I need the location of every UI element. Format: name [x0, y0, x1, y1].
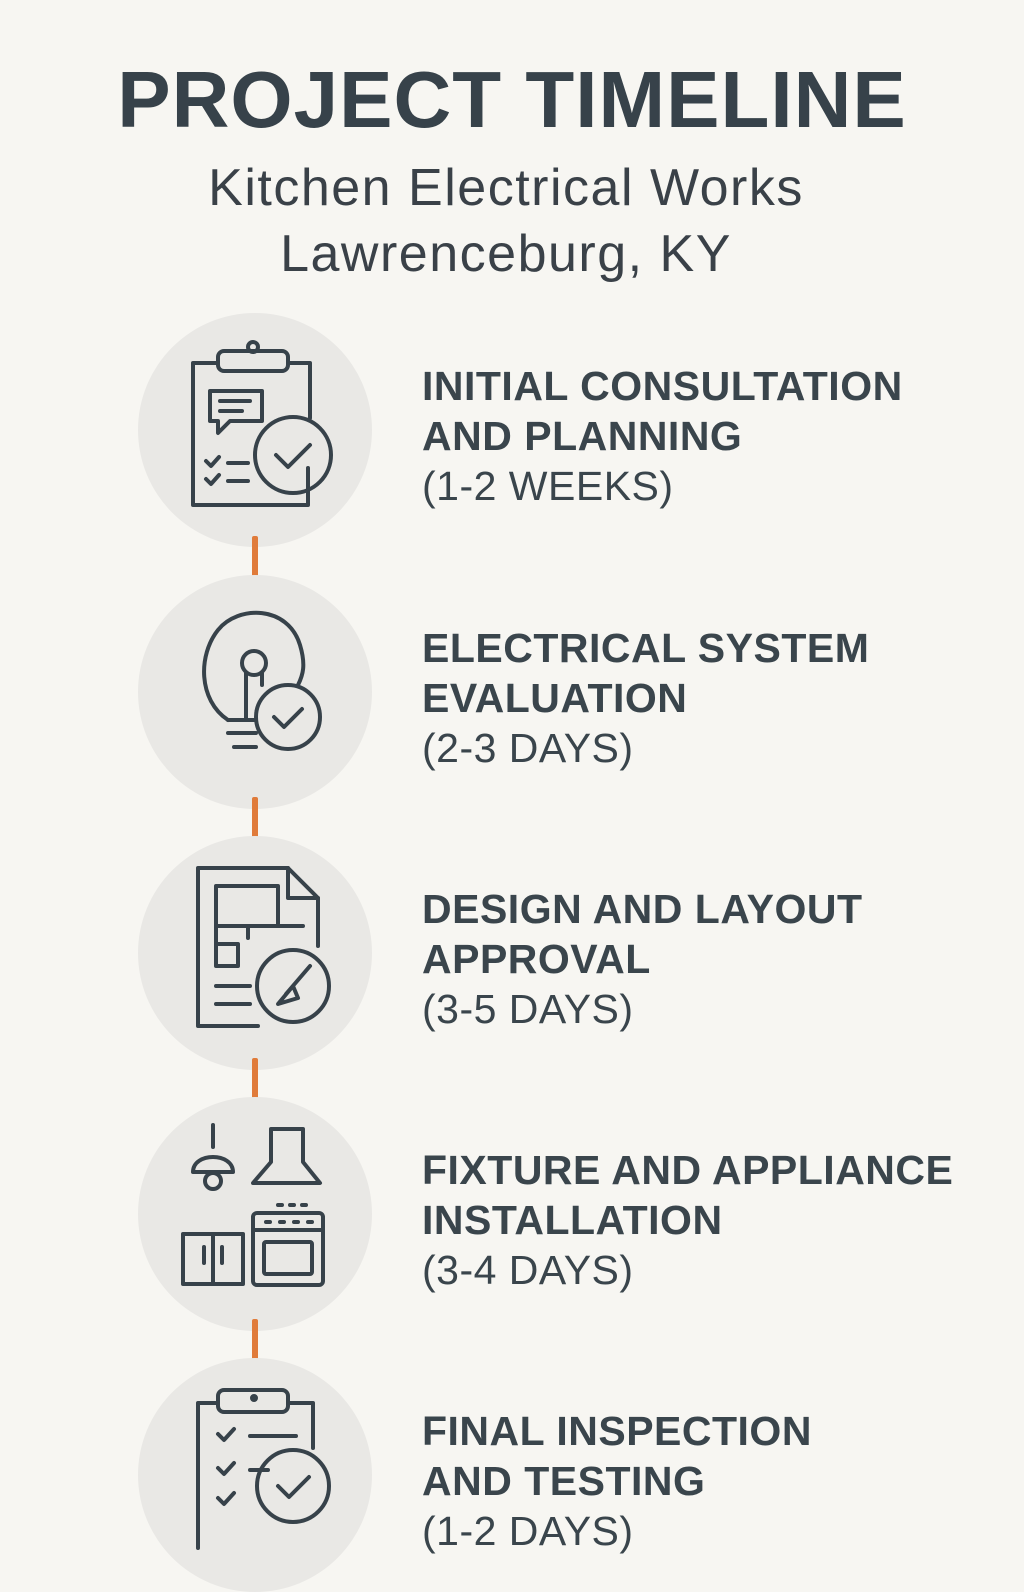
step 4 text: FIXTURE AND APPLIANCE [422, 1147, 953, 1193]
title: PROJECT TIMELINE [117, 55, 907, 144]
step 5 text [422, 1408, 812, 1554]
step 1 text: INITIAL CONSULTATION [422, 363, 903, 409]
step 5 text: FINAL INSPECTION [422, 1408, 812, 1454]
connector [252, 797, 258, 839]
subtitle: Kitchen Electrical Works [208, 159, 804, 217]
step 1 text: (1-2 WEEKS) [422, 463, 674, 509]
step 2 text: ELECTRICAL SYSTEM [422, 625, 869, 671]
step 3 text: APPROVAL [422, 936, 651, 982]
step 4 text: INSTALLATION [422, 1197, 723, 1243]
step 5 text: AND TESTING [422, 1458, 705, 1504]
step 4 text: (3-4 DAYS) [422, 1247, 634, 1293]
circle: step 5 icon checklist [138, 1358, 372, 1592]
connector [252, 1058, 258, 1100]
step 3 text [422, 886, 863, 1032]
circle: step 4 icon kitchen [138, 1097, 372, 1331]
circle: step 1 icon clipboard [138, 313, 372, 547]
step 1 text: AND PLANNING [422, 413, 742, 459]
step 2 text [422, 625, 869, 771]
step 4 text [422, 1147, 953, 1293]
step 5 text: (1-2 DAYS) [422, 1508, 634, 1554]
step 3 text: (3-5 DAYS) [422, 986, 634, 1032]
step 2 text: (2-3 DAYS) [422, 725, 634, 771]
step 1 text [422, 363, 903, 509]
connector [252, 1319, 258, 1361]
circle: step 2 icon bulb [138, 575, 372, 809]
subtitle location: Lawrenceburg, KY [280, 225, 732, 283]
step 3 text: DESIGN AND LAYOUT [422, 886, 863, 932]
connector [252, 536, 258, 578]
circle: step 3 icon blueprint [138, 836, 372, 1070]
step 2 text: EVALUATION [422, 675, 687, 721]
